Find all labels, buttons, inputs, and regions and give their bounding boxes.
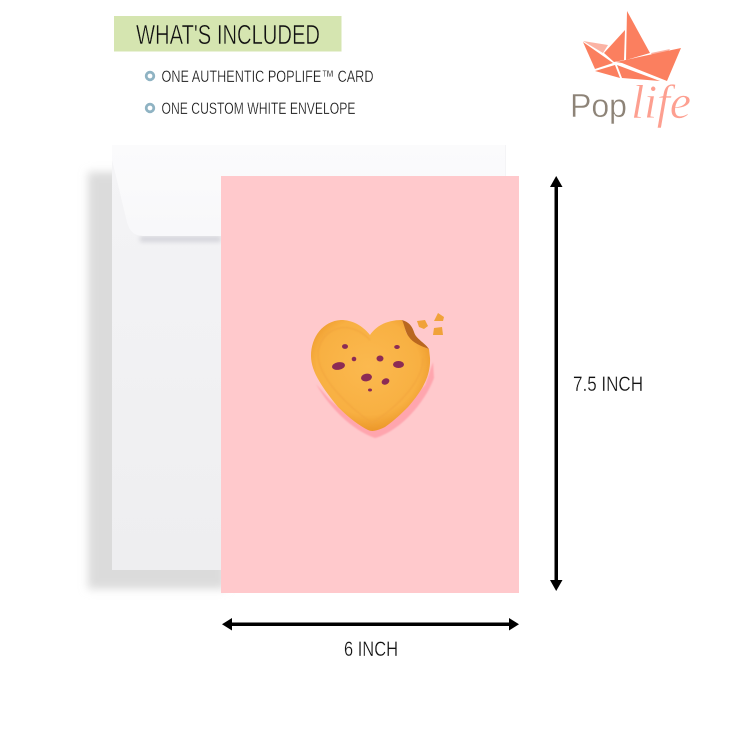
flap shadow <box>140 236 221 242</box>
greeting card <box>221 176 519 593</box>
cookie body <box>311 320 430 431</box>
envelope <box>88 145 506 589</box>
label: height: 7.5 INCH <box>573 373 643 396</box>
card face <box>221 176 519 593</box>
envelope shadow <box>88 172 226 589</box>
icon: paper boat <box>583 11 681 81</box>
arrow: width <box>222 618 519 630</box>
wordmark: Pop: Pop <box>570 87 627 124</box>
item: white envelope: ONE CUSTOM WHITE ENVELOPE <box>162 99 356 118</box>
cookie crumbs <box>417 313 444 335</box>
illustration: heart cookie <box>311 313 444 438</box>
bite edge <box>402 320 429 349</box>
envelope flap <box>112 145 505 236</box>
berry pieces <box>331 344 404 392</box>
heading: what's included <box>114 16 342 52</box>
included items list <box>146 67 374 118</box>
heading: what's included: WHAT'S INCLUDED <box>136 19 320 50</box>
inner rim <box>318 328 423 423</box>
item: authentic card: ONE AUTHENTIC POPLIFE™ CARD <box>162 67 374 86</box>
label: width: 6 INCH <box>344 638 398 661</box>
wordmark: life: life <box>631 76 691 129</box>
envelope body <box>112 145 506 570</box>
item: white envelope <box>146 99 356 118</box>
cookie shadow <box>316 362 434 438</box>
logo: poplife <box>570 11 691 129</box>
arrow: height <box>550 176 562 591</box>
